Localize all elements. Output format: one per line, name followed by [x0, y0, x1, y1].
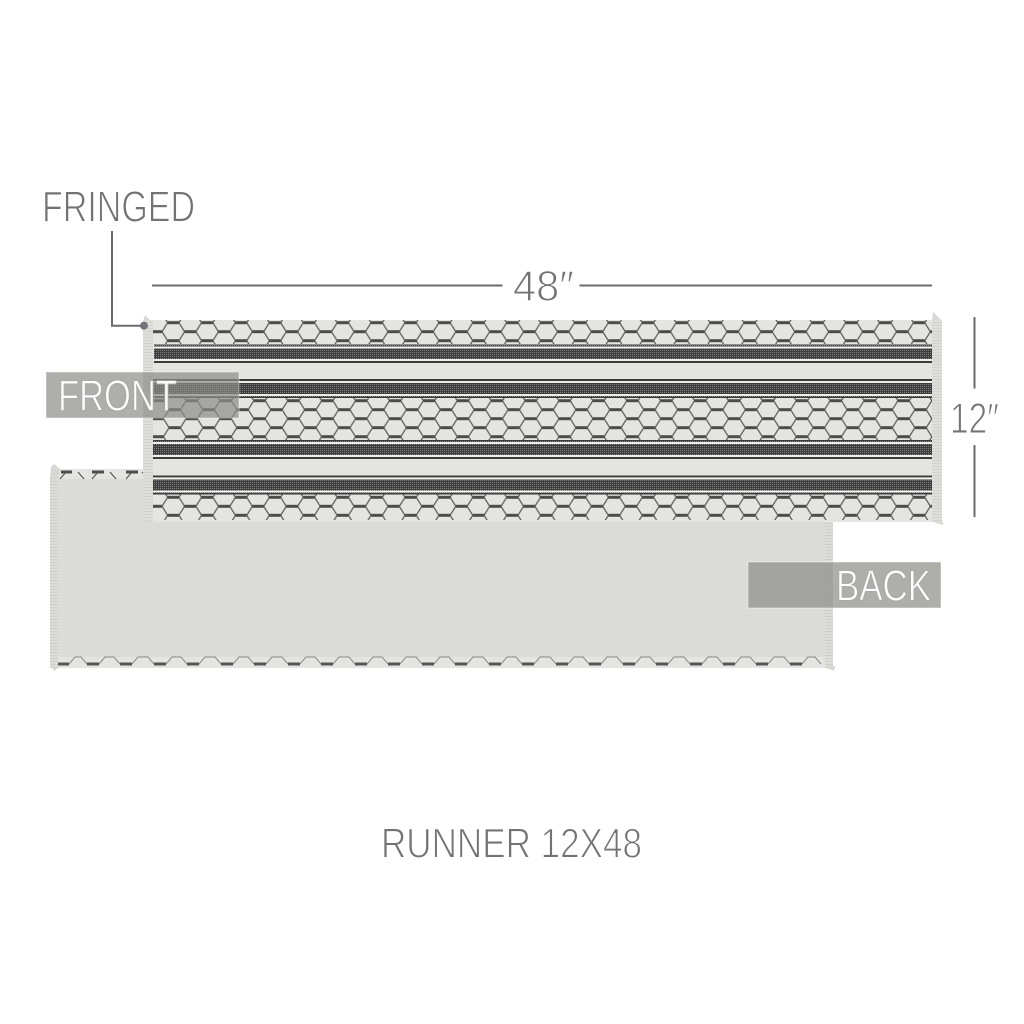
front label box [46, 372, 239, 418]
back label box [748, 562, 941, 608]
leader dot [140, 322, 148, 330]
height line top [974, 317, 976, 388]
top hexagon band [153, 320, 932, 344]
width line left [152, 284, 502, 286]
back left fringe [50, 476, 58, 668]
back label [748, 562, 941, 610]
stripe group 3 [153, 440, 932, 459]
bottom hexagon band [153, 494, 932, 520]
front right fringe [932, 320, 942, 522]
back label text: BACK [836, 562, 931, 610]
height value: 12″ [950, 395, 999, 443]
front body [143, 320, 942, 522]
back right fringe [825, 520, 833, 668]
fringed label: FRINGED [42, 182, 195, 232]
middle hexagon band [153, 398, 932, 440]
stripe group 1 [154, 344, 932, 363]
stripe group 4 [153, 476, 932, 494]
height line bottom [974, 445, 976, 517]
stripe group 2 [153, 379, 932, 398]
width value: 48″ [513, 262, 574, 310]
back body [51, 469, 833, 668]
back bottom hexagon band [58, 657, 826, 668]
product size caption: RUNNER 12X48 [381, 820, 642, 866]
back corner tassels [50, 464, 835, 671]
fringed callout [42, 182, 195, 330]
back top hexagon band [58, 469, 148, 479]
front label text: FRONT [58, 372, 177, 420]
front corner tassels [143, 312, 943, 525]
back of runner [50, 464, 835, 671]
width line right [580, 284, 932, 286]
front left fringe [143, 320, 153, 522]
leader line [112, 231, 143, 326]
front of runner [143, 312, 943, 525]
front label [46, 372, 239, 420]
